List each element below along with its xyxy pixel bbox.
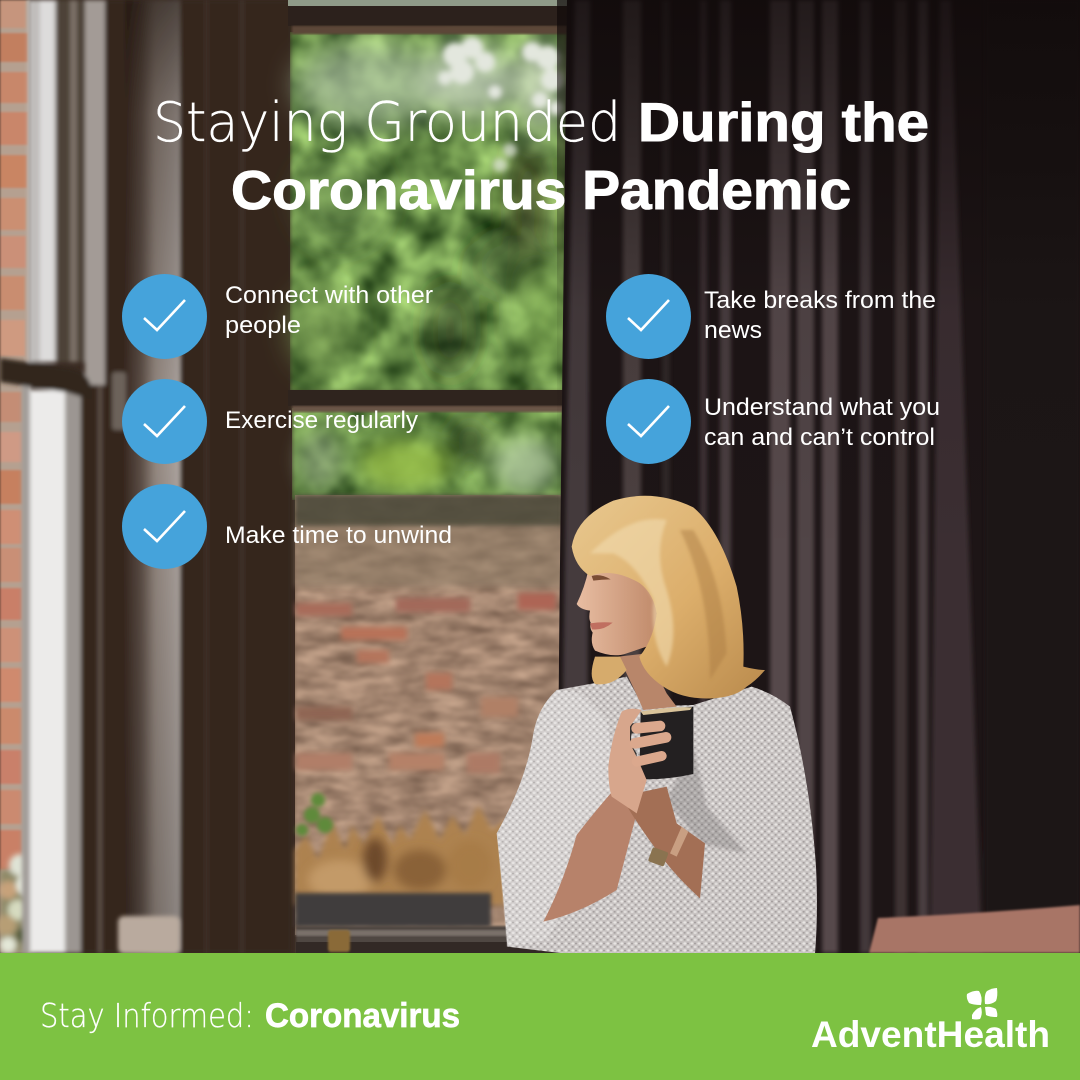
checklist item: connect with other people: Connect with other bbox=[225, 282, 433, 309]
footer text: stay informed bbox=[40, 996, 460, 1035]
checklist item: take breaks from the news bbox=[606, 274, 936, 359]
title: Coronavirus Pandemic bbox=[231, 159, 851, 221]
footer text: stay informed: Stay Informed: bbox=[40, 996, 254, 1035]
checklist item: take breaks from the news: Take breaks from the bbox=[704, 287, 936, 314]
title bbox=[153, 91, 929, 221]
black mug with hand bbox=[608, 707, 693, 813]
facial features bbox=[590, 575, 613, 630]
green footer band bbox=[0, 953, 1080, 1080]
title: Staying Grounded bbox=[153, 91, 621, 154]
checklist item: exercise regularly: Exercise regularly bbox=[225, 407, 418, 434]
checklist item: understand what you can and can't control bbox=[606, 379, 940, 464]
left brick wall bbox=[0, 0, 30, 953]
window: garden brick wall bbox=[295, 495, 563, 935]
neck bbox=[618, 653, 677, 710]
window: middle transom and lower foliage bbox=[288, 390, 568, 500]
checklist item: connect with other people: people bbox=[225, 312, 301, 339]
dark curtain bbox=[557, 0, 1080, 953]
checklist item: understand what you can and can't control: Understand what you bbox=[704, 394, 940, 421]
flowers at lower left bbox=[0, 854, 36, 953]
blond hair bbox=[572, 496, 765, 699]
checklist item: make time to unwind: Make time to unwind bbox=[225, 522, 452, 549]
AdventHealth logo bbox=[811, 988, 1050, 1055]
checklist item: connect with other people bbox=[122, 274, 433, 359]
pink sofa bbox=[869, 905, 1080, 953]
wristwatch bbox=[648, 827, 688, 867]
footer text: stay informed: Coronavirus bbox=[265, 997, 460, 1035]
window frames at left bbox=[0, 0, 292, 953]
face bbox=[577, 563, 657, 655]
bare arms bbox=[543, 787, 705, 922]
garden planter with dried plant bbox=[118, 793, 564, 954]
window: foliage bbox=[288, 0, 568, 392]
title: During the bbox=[638, 91, 929, 153]
woman holding a mug bbox=[497, 496, 817, 953]
checklist item: take breaks from the news: news bbox=[704, 317, 762, 344]
AdventHealth logo: AdventHealth bbox=[811, 1014, 1050, 1055]
checklist item: exercise regularly bbox=[122, 379, 418, 464]
checklist item: make time to unwind bbox=[122, 484, 452, 569]
checklist item: understand what you can and can't control: can and can’t control bbox=[704, 424, 935, 451]
sweater bbox=[497, 677, 817, 953]
icon: four-petal flower bbox=[967, 988, 997, 1020]
